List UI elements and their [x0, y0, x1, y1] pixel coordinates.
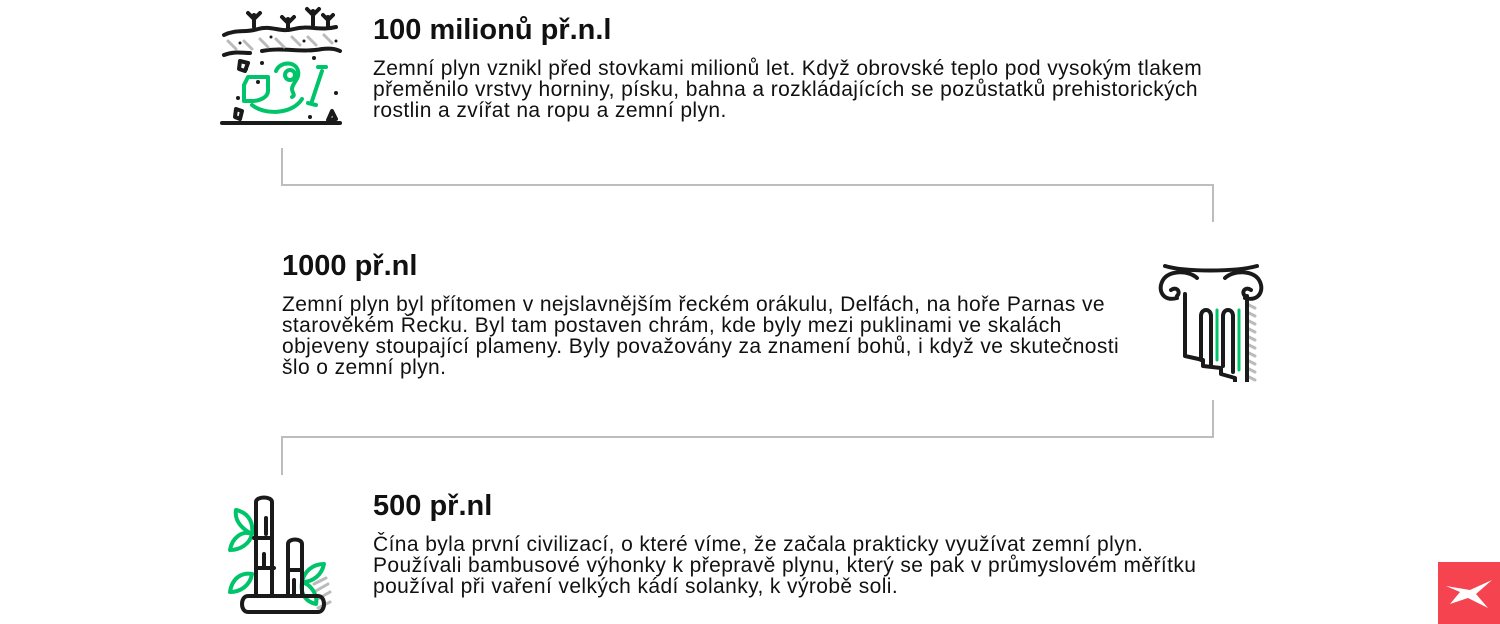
icon: bamboo — [228, 496, 332, 614]
connector 1 — [281, 148, 1214, 222]
text block: 100 milionů př.n.l: přeměnilo vrstvy horniny, písku, bahna a rozkládajících se pozůstatků prehistorických — [373, 78, 1198, 101]
text block: 100 milionů př.n.l: 100 milionů př.n.l — [373, 14, 612, 46]
text block: 1000 př.nl — [282, 250, 1119, 379]
connector 2 — [281, 400, 1214, 475]
text block: 100 milionů př.n.l — [373, 14, 1202, 122]
icon: greek column — [1158, 264, 1264, 382]
text block: 500 př.nl — [373, 490, 1196, 598]
text block: 100 milionů př.n.l: rostlin a zvířat na ropu a zemní plyn. — [373, 99, 727, 122]
text block: 500 př.nl: používal při vaření velkých kádí solanky, k výrobě soli. — [373, 575, 898, 598]
text block: 500 př.nl: Čína byla první civilizací, o které víme, že začala prakticky využívat zemní plyn. — [373, 533, 1143, 556]
text block: 1000 př.nl: Zemní plyn byl přítomen v nejslavnějším řeckém orákulu, Delfách, na hoře Parnas ve — [282, 293, 1105, 316]
logo — [1438, 562, 1500, 624]
icon: fossil layers — [220, 6, 342, 125]
text block: 500 př.nl: Používali bambusové výhonky k přepravě plynu, který se pak v průmyslovém měřítku — [373, 554, 1196, 577]
text block: 100 milionů př.n.l: Zemní plyn vznikl před stovkami milionů let. Když obrovské teplo pod vysokým tlakem — [373, 57, 1202, 80]
text block: 1000 př.nl: 1000 př.nl — [282, 250, 417, 282]
text block: 500 př.nl: 500 př.nl — [373, 490, 492, 522]
text block: 1000 př.nl: objeveny stoupající plameny. Byly považovány za znamení bohů, i když ve skutečnosti — [282, 335, 1119, 358]
text block: 1000 př.nl: starověkém Řecku. Byl tam postaven chrám, kde byly mezi puklinami ve skalách — [282, 314, 1062, 337]
text block: 1000 př.nl: šlo o zemní plyn. — [282, 356, 446, 379]
